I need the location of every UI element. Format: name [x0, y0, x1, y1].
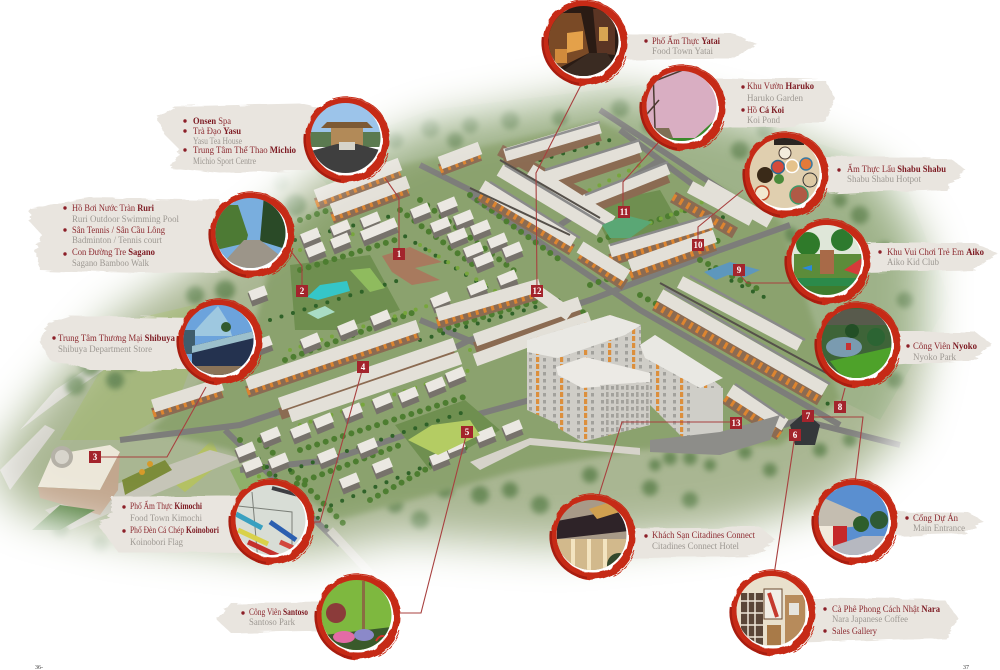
label: Onsen, Yasu, Michio	[157, 104, 330, 173]
marker 6: 6	[793, 430, 798, 440]
label: Nyoko: Công Viên Nyoko	[913, 341, 977, 351]
clubhouse roof	[382, 247, 442, 285]
label: Ruri, Tennis, Sagano: Badminton / Tennis court	[72, 235, 162, 245]
marker 12	[531, 285, 543, 297]
label: Santoso	[217, 602, 330, 633]
label: Onsen, Yasu, Michio: Onsen Spa	[193, 116, 231, 126]
marker 1	[393, 248, 405, 260]
photo: main entrance	[813, 479, 897, 563]
entrance gate	[790, 412, 820, 445]
photo: Aiko kids club	[786, 219, 870, 303]
label: Yatai: Phố Ẩm Thực Yatai	[652, 36, 720, 46]
label: Shibuya: Shibuya Department Store	[58, 344, 152, 354]
blue roof sales pavilion	[704, 262, 760, 280]
label: Citadines: Citadines Connect Hotel	[652, 541, 739, 551]
label: Aiko	[860, 243, 997, 272]
label: Yatai: Food Town Yatai	[652, 46, 713, 56]
label: Main Entrance: Main Entrance	[913, 523, 965, 533]
apartment towers	[527, 315, 723, 445]
marker 1: 1	[397, 249, 402, 259]
label: Citadines	[625, 527, 776, 559]
label: Haruko, Koi: Haruko Garden	[747, 93, 803, 103]
marker 3: 3	[93, 452, 98, 462]
marker 2: 2	[300, 286, 305, 296]
photo: Haruko cherry garden	[641, 65, 725, 149]
label: Kimochi, Koinobori	[98, 495, 252, 553]
photo: Sagano bamboo walk	[210, 192, 294, 276]
label: Yatai	[620, 33, 758, 60]
label: Onsen, Yasu, Michio: Trà Đạo Yasu	[193, 126, 241, 136]
marker 6	[789, 429, 801, 441]
podium and plaza	[650, 415, 780, 455]
photo: Santoso park	[316, 574, 400, 658]
ground and surrounding greenery	[0, 64, 955, 583]
photo: Citadines hotel	[551, 494, 635, 579]
label: Ruri, Tennis, Sagano: Sagano Bamboo Walk	[72, 258, 149, 268]
label: Nara, Sales Gallery: Sales Gallery	[832, 626, 877, 636]
townhouse rows	[153, 122, 830, 435]
label: Haruko, Koi	[715, 78, 835, 128]
marker 7	[802, 410, 814, 422]
marker 13: 13	[732, 418, 741, 428]
photo: Michio sport centre	[305, 97, 389, 181]
label: Onsen, Yasu, Michio: Trung Tâm Thể Thao Michio	[193, 145, 296, 155]
label: Shibuya: Trung Tâm Thương Mại Shibuya	[58, 333, 175, 343]
pool area	[307, 268, 385, 319]
label: Ruri, Tennis, Sagano: Hồ Bơi Nước Tràn Ruri	[72, 203, 154, 213]
label: Haruko, Koi: Hồ Cá Koi	[747, 105, 784, 115]
white roof villas	[237, 201, 521, 488]
label: Onsen, Yasu, Michio: Yasu Tea House	[193, 136, 242, 146]
label: Ruri, Tennis, Sagano: Ruri Outdoor Swimming Pool	[72, 214, 179, 224]
label: Shabu Shabu: Shabu Shabu Hotpot	[847, 174, 921, 184]
commercial building at marker 3	[32, 445, 172, 530]
roads	[120, 110, 900, 545]
marker 2	[296, 285, 308, 297]
marker 10: 10	[694, 240, 703, 250]
photo: Yatai street	[543, 0, 627, 84]
aerial master plan map	[0, 64, 955, 583]
label: Aiko: Khu Vui Chơi Trẻ Em Aiko	[887, 247, 984, 257]
label: Shabu Shabu: Ẩm Thực Lẩu Shabu Shabu	[847, 164, 946, 174]
landscaped developed zone	[150, 120, 840, 520]
label: Kimochi, Koinobori: Koinobori Flag	[130, 537, 183, 547]
label: Ruri, Tennis, Sagano: Con Đường Tre Sagano	[72, 247, 155, 257]
label: Santoso: Công Viên Santoso	[249, 607, 308, 617]
label: Nara, Sales Gallery: Nara Japanese Coffee	[832, 614, 908, 624]
label: Nyoko	[890, 332, 992, 365]
marker 13	[730, 417, 742, 429]
label: Shibuya	[40, 316, 200, 370]
label: Onsen, Yasu, Michio: Michio Sport Centre	[193, 156, 256, 166]
label: Nyoko: Nyoko Park	[913, 352, 956, 362]
park at marker 11	[602, 215, 652, 238]
numbered map markers	[89, 206, 846, 463]
marker 8: 8	[838, 402, 843, 412]
label: Haruko, Koi: Koi Pond	[747, 115, 780, 125]
label: Main Entrance: Cổng Dự Án	[913, 513, 958, 523]
marker 8	[834, 401, 846, 413]
green tree texture behind buildings	[240, 140, 830, 530]
label: Haruko, Koi: Khu Vườn Haruko	[747, 81, 814, 91]
photo: Nyoko park	[816, 302, 900, 386]
marker 5	[461, 426, 473, 438]
marker 7: 7	[806, 411, 811, 421]
photo: Shibuya department store	[178, 299, 262, 383]
photo: Koinobori flags	[230, 479, 314, 563]
photo: Shabu Shabu table	[744, 132, 828, 216]
park at marker 5	[408, 420, 480, 455]
label: Kimochi, Koinobori: Phố Ẩm Thực Kimochi	[130, 501, 202, 511]
photo: Nara coffee	[731, 570, 815, 654]
pale road edge to the lower right	[327, 528, 363, 562]
marker 11: 11	[620, 207, 629, 217]
label: Ruri, Tennis, Sagano: Sân Tennis / Sân Cầu Lông	[72, 225, 165, 235]
marker 9	[733, 264, 745, 276]
label: Nara, Sales Gallery	[800, 597, 958, 642]
label: Main Entrance	[890, 511, 983, 536]
marker 4: 4	[361, 362, 366, 372]
marker 9: 9	[737, 265, 742, 275]
landscaped garden ground	[290, 190, 680, 470]
label: Ruri, Tennis, Sagano	[30, 198, 240, 273]
marker 4	[357, 361, 369, 373]
label: Kimochi, Koinobori: Phố Đèn Cá Chép Koinobori	[130, 525, 219, 535]
label: Kimochi, Koinobori: Food Town Kimochi	[130, 513, 202, 523]
label: Nara, Sales Gallery: Cà Phê Phong Cách Nhật Nara	[832, 604, 940, 614]
marker 12: 12	[532, 286, 542, 296]
label: Aiko: Aiko Kid Club	[887, 257, 939, 267]
label: Santoso: Santoso Park	[249, 617, 295, 627]
marker 5: 5	[465, 427, 470, 437]
marker 3	[89, 451, 101, 463]
label: Citadines: Khách Sạn Citadines Connect	[652, 530, 755, 540]
marker 11	[618, 206, 630, 218]
label: Shabu Shabu	[820, 156, 966, 193]
leader lines	[95, 83, 863, 613]
marker 10	[692, 239, 704, 251]
